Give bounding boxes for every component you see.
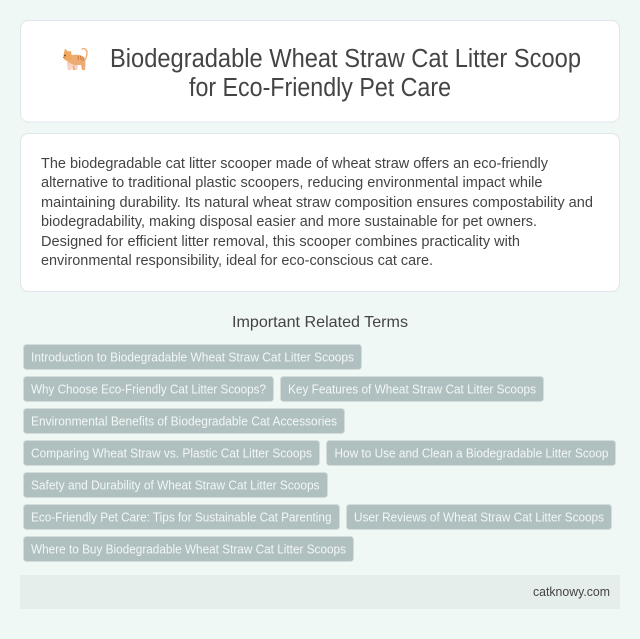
tag: Safety and Durability of Wheat Straw Cat Litter Scoops [31, 478, 320, 492]
tag: Comparing Wheat Straw vs. Plastic Cat Litter Scoops [31, 446, 312, 460]
description text: environmental responsibility, ideal for eco-conscious cat care. [41, 253, 433, 269]
description text: alternative to traditional plastic scoopers, reducing environmental impact while [41, 175, 542, 191]
tag [24, 536, 354, 562]
title text: Biodegradable Wheat Straw Cat Litter Scoop [110, 45, 581, 73]
tag: Key Features of Wheat Straw Cat Litter Scoops [288, 382, 536, 396]
tag [24, 472, 328, 498]
tag [24, 504, 340, 530]
tag: How to Use and Clean a Biodegradable Litter Scoop [334, 446, 608, 460]
tag [24, 344, 362, 370]
tag: Where to Buy Biodegradable Wheat Straw Cat Litter Scoops [31, 542, 346, 556]
description text [41, 156, 593, 269]
tag [326, 440, 616, 466]
heading: important related terms: Important Related Terms [232, 314, 408, 331]
tag [24, 440, 320, 466]
panel: description card [20, 134, 620, 292]
tag: User Reviews of Wheat Straw Cat Litter Scoops [354, 510, 604, 524]
tag [280, 376, 544, 402]
footer site name: catknowy.com [533, 584, 610, 599]
description text: biodegradability, making disposal easier and more sustainable for pet owners. [41, 214, 537, 230]
tag: Introduction to Biodegradable Wheat Straw Cat Litter Scoops [31, 350, 354, 364]
panel: related term tags [24, 344, 616, 562]
tag: Environmental Benefits of Biodegradable Cat Accessories [31, 414, 337, 428]
tag [24, 408, 344, 434]
tag [24, 376, 274, 402]
tag: Eco-Friendly Pet Care: Tips for Sustainable Cat Parenting [31, 510, 332, 524]
tag: Why Choose Eco-Friendly Cat Litter Scoops? [31, 382, 266, 396]
title text [110, 45, 581, 102]
description text: The biodegradable cat litter scooper made of wheat straw offers an eco-friendly [41, 156, 549, 172]
description text: maintaining durability. Its natural wheat straw composition ensures compostability and [41, 195, 593, 211]
tag [346, 504, 612, 530]
panel: title card [20, 20, 620, 122]
title text: for Eco-Friendly Pet Care [189, 74, 451, 102]
description text: Designed for efficient litter removal, this scooper combines practicality with [41, 234, 520, 250]
footer bar [20, 575, 620, 609]
icon: cat [63, 48, 87, 70]
